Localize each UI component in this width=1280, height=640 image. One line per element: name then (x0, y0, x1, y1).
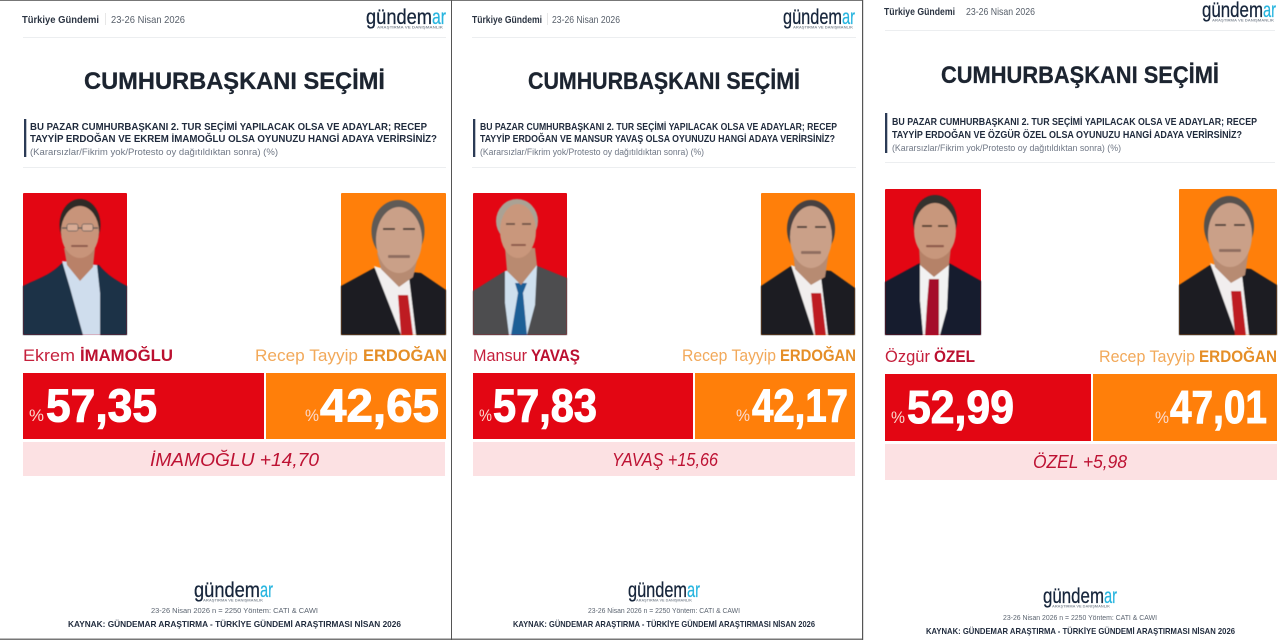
candidate name: Özel: Özgür (885, 347, 930, 366)
title: CUMHURBAŞKANI SEÇİMİ (528, 68, 800, 95)
photo: Ekrem İmamoğlu (23, 193, 127, 335)
candidate name: Yavaş (473, 346, 580, 365)
panel: Yavaş vs Erdoğan (452, 0, 863, 640)
header: 23-26 Nisan 2026 (552, 14, 620, 26)
question block: (Kararsızlar/Fikrim yok/Protesto oy dağıtıldıktan sonra) (%) (30, 147, 278, 158)
question block: BU PAZAR CUMHURBAŞKANI 2. TUR SEÇİMİ YAPILACAK OLSA VE ADAYLAR; RECEP (30, 120, 427, 133)
header (22, 13, 446, 38)
footer source: 23-26 Nisan 2026 n = 2250 Yöntem: CATI & CAWI (151, 606, 318, 615)
result bar: İmamoğlu: 57,35 (46, 380, 157, 432)
logo: gündemar: ARAŞTIRMA VE DANIŞMANLIK (377, 26, 444, 30)
footer source: KAYNAK: GÜNDEMAR ARAŞTIRMA - TÜRKİYE GÜNDEMİ ARAŞTIRMASI NİSAN 2026 (513, 619, 815, 629)
candidate name: Erdoğan: Recep Tayyip (682, 346, 776, 365)
footer source (513, 606, 815, 629)
result bar: Erdoğan (266, 373, 446, 439)
header: 23-26 Nisan 2026 (966, 6, 1035, 18)
result bar: Erdoğan: % (1155, 408, 1169, 427)
candidate name: Erdoğan (682, 346, 856, 365)
footer source: KAYNAK: GÜNDEMAR ARAŞTIRMA - TÜRKİYE GÜNDEMİ ARAŞTIRMASI NİSAN 2026 (926, 626, 1235, 636)
panel: Özel vs Erdoğan (864, 0, 1280, 640)
candidate name: Erdoğan: ERDOĞAN (363, 346, 447, 365)
result bar: Yavaş (473, 373, 693, 439)
result bar: Erdoğan: % (736, 406, 750, 425)
title: CUMHURBAŞKANI SEÇİMİ (941, 62, 1219, 89)
candidate name: İmamoğlu: Ekrem (23, 346, 75, 365)
margin callout: İMAMOĞLU +14,70 (150, 450, 319, 470)
footer logo: ARAŞTIRMA VE DANIŞMANLIK (203, 598, 264, 602)
result bar: Erdoğan: % (305, 406, 319, 425)
header: Türkiye Gündemi (22, 14, 99, 26)
logo: gündemar: gündem (783, 6, 842, 29)
footer source (68, 606, 401, 629)
result bar: Özel: 52,99 (907, 381, 1014, 433)
photo: Recep Tayyip Erdoğan (1179, 189, 1277, 335)
photo: Mansur Yavaş (473, 193, 567, 335)
header (472, 13, 856, 38)
photo: Özgür Özel (885, 189, 981, 335)
header (884, 6, 1275, 31)
footer logo: gündem (628, 579, 687, 602)
candidate name: Erdoğan: Recep Tayyip (1099, 347, 1195, 366)
photo: Recep Tayyip Erdoğan (761, 193, 855, 335)
logo: gündemar: ar (432, 6, 446, 29)
footer logo: ar (1104, 585, 1117, 608)
result bar: Erdoğan: 42,65 (320, 380, 439, 432)
logo: gündemar: ar (842, 6, 855, 29)
result bar: Yavaş: % (479, 406, 492, 425)
title: CUMHURBAŞKANI SEÇİMİ (84, 68, 385, 95)
result bar: İmamoğlu (23, 373, 264, 439)
footer source (926, 613, 1235, 636)
footer logo: ar (687, 579, 700, 602)
result bar: Özel: % (891, 408, 905, 427)
panel: İmamoğlu vs Erdoğan (0, 0, 452, 640)
result bar: İmamoğlu: % (29, 406, 44, 425)
logo: gündemar: ARAŞTIRMA VE DANIŞMANLIK (1212, 18, 1275, 22)
header: Türkiye Gündemi (472, 14, 542, 26)
margin callout: ÖZEL +5,98 (1033, 452, 1127, 472)
result bar: Erdoğan (695, 373, 855, 439)
candidate name: Özel: ÖZEL (934, 347, 975, 366)
candidate name: Yavaş: Mansur (473, 346, 527, 365)
logo: gündemar: gündem (366, 6, 432, 29)
candidate name: Erdoğan (1099, 347, 1277, 366)
question block: (Kararsızlar/Fikrim yok/Protesto oy dağıtıldıktan sonra) (%) (480, 147, 704, 158)
question block (885, 113, 1275, 163)
result bar: Özel (885, 374, 1091, 441)
result bar: Erdoğan (1093, 374, 1277, 441)
candidate name: İmamoğlu (23, 346, 173, 365)
result bar: Erdoğan: 42,17 (752, 380, 848, 432)
question block: TAYYİP ERDOĞAN VE MANSUR YAVAŞ OLSA OYUNUZU HANGİ ADAYA VERİRSİNİZ? (480, 132, 835, 145)
candidate name: Erdoğan: Recep Tayyip (255, 346, 358, 365)
question block: (Kararsızlar/Fikrim yok/Protesto oy dağıtıldıktan sonra) (%) (892, 143, 1121, 154)
logo: gündemar: ARAŞTIRMA VE DANIŞMANLIK (793, 26, 854, 30)
question block (472, 119, 856, 168)
question block: BU PAZAR CUMHURBAŞKANI 2. TUR SEÇİMİ YAPILACAK OLSA VE ADAYLAR; RECEP (480, 120, 837, 133)
footer logo: gündem (1043, 585, 1104, 608)
question block (23, 119, 446, 168)
footer source: KAYNAK: GÜNDEMAR ARAŞTIRMA - TÜRKİYE GÜNDEMİ ARAŞTIRMASI NİSAN 2026 (68, 619, 401, 629)
footer source: 23-26 Nisan 2026 n = 2250 Yöntem: CATI & CAWI (1003, 613, 1157, 622)
candidate name: Yavaş: YAVAŞ (531, 346, 580, 365)
question block: TAYYİP ERDOĞAN VE EKREM İMAMOĞLU OLSA OYUNUZU HANGİ ADAYA VERİRSİNİZ? (30, 132, 437, 145)
candidate name: Erdoğan (255, 346, 447, 365)
footer logo: ar (260, 579, 273, 602)
photo: Recep Tayyip Erdoğan (341, 193, 446, 335)
result bar: Yavaş: 57,83 (493, 380, 597, 432)
footer logo: ARAŞTIRMA VE DANIŞMANLIK (1052, 604, 1111, 608)
header: Türkiye Gündemi (884, 6, 955, 18)
candidate name: İmamoğlu: İMAMOĞLU (80, 346, 173, 365)
footer logo: ARAŞTIRMA VE DANIŞMANLIK (636, 598, 693, 602)
footer logo: gündem (194, 579, 260, 602)
margin callout (473, 442, 855, 476)
margin callout (885, 444, 1277, 480)
margin callout (23, 442, 445, 476)
header: 23-26 Nisan 2026 (111, 14, 185, 26)
candidate name: Erdoğan: ERDOĞAN (780, 346, 856, 365)
footer source: 23-26 Nisan 2026 n = 2250 Yöntem: CATI & CAWI (588, 606, 740, 615)
margin callout: YAVAŞ +15,66 (612, 450, 719, 470)
candidate name: Özel (885, 347, 975, 366)
